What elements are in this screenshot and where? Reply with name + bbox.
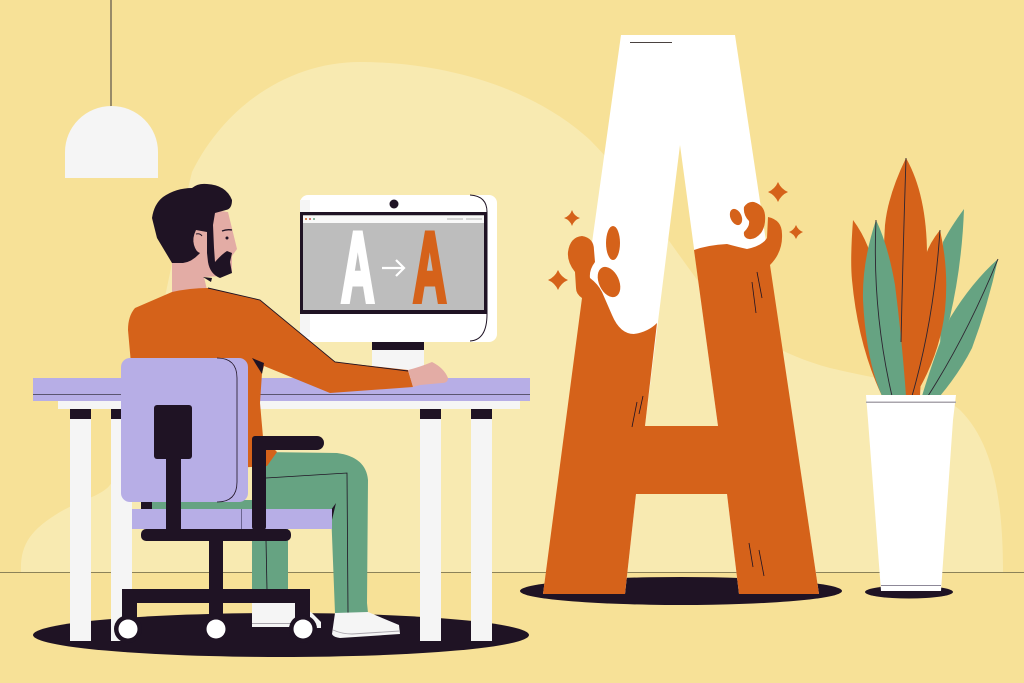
paint drop — [744, 202, 765, 239]
leaf — [882, 158, 927, 396]
floor shadow under plant — [865, 586, 953, 598]
paint drop — [606, 226, 620, 260]
rear shoe — [252, 603, 321, 628]
desk legs and frame — [58, 401, 520, 641]
chair seat — [132, 509, 332, 529]
leaf — [851, 220, 900, 396]
paint drop — [593, 263, 625, 301]
giant letter A — [543, 35, 819, 594]
orange letter A on screen: A — [413, 213, 447, 323]
paint drop — [727, 207, 745, 227]
ear — [193, 230, 207, 253]
man sitting at the desk — [128, 184, 448, 638]
armrest — [252, 436, 324, 530]
leaf — [940, 209, 964, 350]
leaf — [863, 220, 906, 396]
office chair — [114, 358, 332, 643]
pendant lamp — [65, 0, 158, 178]
eye and eyebrow — [222, 230, 232, 240]
white part of the letter — [543, 35, 819, 594]
arrow on screen — [382, 260, 404, 276]
monitor stand — [372, 335, 424, 380]
webcam — [390, 200, 398, 208]
floor shadow under desk — [33, 613, 529, 657]
leaf — [906, 230, 946, 396]
orange paint covering the letter — [543, 217, 819, 594]
monitor screen — [300, 212, 487, 314]
sparkles — [548, 182, 803, 290]
computer monitor — [300, 195, 497, 380]
floor shadow under letter — [520, 577, 842, 605]
leaf — [922, 259, 998, 396]
chair wheels — [114, 615, 317, 643]
potted plant — [851, 158, 998, 591]
background blob — [21, 62, 1003, 572]
chair base — [122, 529, 310, 621]
plant pot — [866, 395, 956, 591]
front shoe — [332, 612, 400, 638]
scratch lines — [632, 272, 764, 576]
white letter A on screen: A — [341, 213, 375, 323]
backrest support — [154, 405, 192, 531]
hair and beard — [152, 184, 232, 282]
rear trouser leg — [252, 525, 288, 605]
neck and face — [172, 210, 237, 294]
front trouser leg — [141, 452, 368, 613]
leaf veins — [875, 158, 998, 396]
chair back — [121, 358, 248, 502]
torso and arm in orange sweater — [128, 288, 413, 470]
desk top — [33, 378, 530, 401]
monitor body — [300, 195, 497, 342]
hand — [408, 362, 448, 387]
